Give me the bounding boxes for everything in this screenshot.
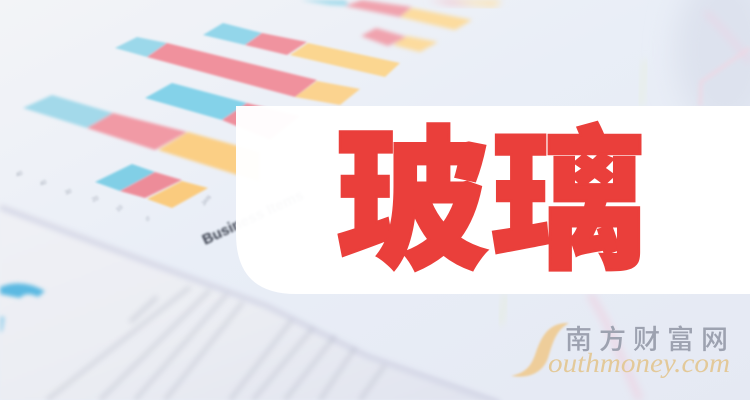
logo latin name: outhmoney.com: [548, 348, 730, 378]
axis tick labels: 30: [64, 188, 73, 197]
axis tick labels: [15, 170, 213, 223]
blurred document text lines: [47, 287, 385, 400]
axis tick labels: 40: [39, 179, 48, 188]
bar row: sixth: [300, 0, 472, 30]
lower right soft pink and green streaks: [500, 294, 640, 400]
bar row: fourth: [203, 23, 400, 77]
axis tick labels: 20: [91, 195, 100, 204]
blue blob icon: [0, 283, 45, 333]
bar row: third: [115, 37, 360, 105]
axis tick labels: 40: [15, 170, 24, 179]
axis tick labels: 10: [115, 204, 125, 214]
bar row: lower left: [23, 95, 260, 182]
bar chart rows: [23, 0, 502, 208]
lower page sheet: [0, 203, 500, 400]
bar row: fifth: [361, 28, 438, 52]
chart caption: Business Items: Business Items: [200, 187, 306, 249]
watermark logo: southmoney: [511, 323, 735, 378]
title text: 玻璃: [336, 116, 646, 289]
bar row: seventh: [428, 0, 502, 7]
logo Chinese name: 南方财富网: [565, 325, 735, 355]
right blurred background with pink lines: [640, 0, 750, 130]
axis tick labels: 0: [146, 217, 150, 223]
logo swoosh S: [511, 323, 569, 377]
bar row: second: [145, 83, 300, 140]
axis tick labels: JAN: [201, 195, 213, 207]
bar row: small front bar: [95, 164, 208, 208]
